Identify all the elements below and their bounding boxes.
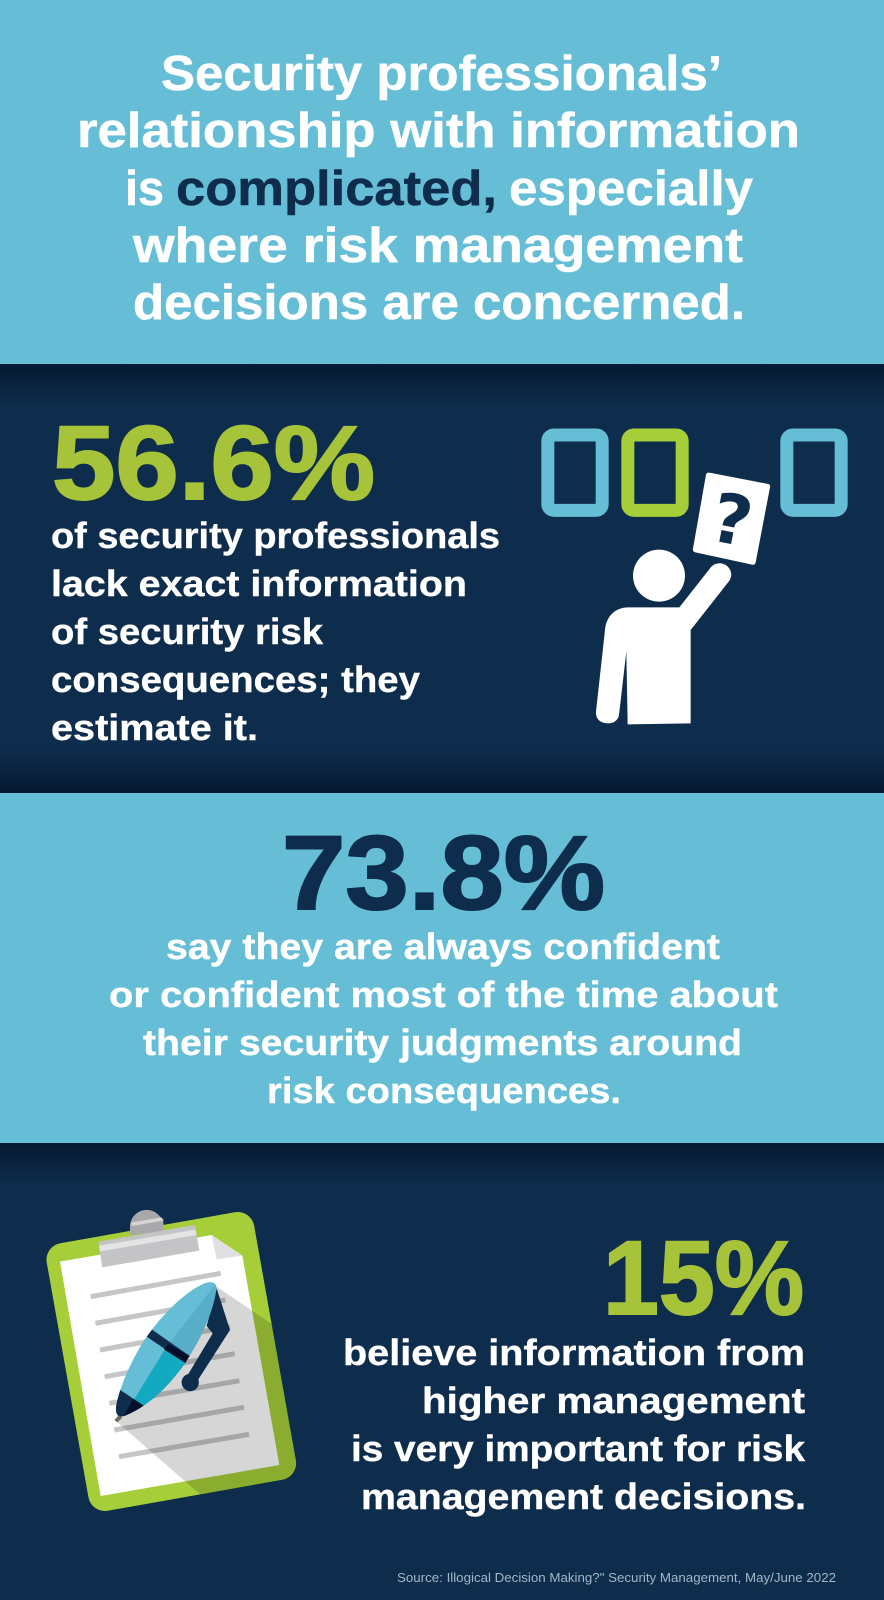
- statistic text: risk consequences.: [267, 1070, 621, 1111]
- statistic text: [343, 1332, 806, 1517]
- clipboard board: [44, 1209, 299, 1514]
- title: is: [125, 162, 164, 216]
- statistic text: estimate it.: [51, 707, 258, 748]
- title: relationship with information: [77, 104, 800, 158]
- statistic number: 56.6%: 56.6%: [52, 405, 375, 522]
- title: complicated,: [176, 162, 497, 216]
- title: especially: [509, 162, 753, 216]
- statistic text: of security risk: [51, 611, 324, 652]
- statistic text: [109, 926, 778, 1111]
- statistic text: of security professionals: [51, 515, 500, 556]
- panel: 73.8% statistic: [0, 793, 884, 1143]
- icon: person holding question card: [548, 435, 841, 724]
- statistic text: higher management: [422, 1380, 805, 1421]
- title: decisions are concerned.: [133, 276, 745, 330]
- pen body: [116, 1282, 216, 1417]
- statistic text: say they are always confident: [166, 926, 720, 967]
- clip: [98, 1217, 199, 1267]
- icon: clipboard with pen: [46, 1210, 296, 1511]
- statistic number: 15%: 15%: [603, 1220, 804, 1337]
- clip tab: [130, 1210, 163, 1235]
- pen clip: [182, 1288, 230, 1391]
- source note: Source: Illogical Decision Making?" Security Management, May/June 2022: [397, 1570, 836, 1585]
- statistic text: management decisions.: [361, 1476, 806, 1517]
- statistic text: consequences; they: [51, 659, 420, 700]
- panel: header: [0, 0, 884, 364]
- title: Security professionals’: [161, 47, 722, 101]
- panel: 56.6% statistic: [0, 364, 884, 793]
- icon: person holding question card: ?: [705, 479, 759, 564]
- clipboard paper: [60, 1235, 279, 1496]
- pen shadow: [118, 1286, 296, 1494]
- statistic text: their security judgments around: [143, 1022, 742, 1063]
- statistic text: believe information from: [343, 1332, 805, 1373]
- panel: 15% statistic: [0, 1143, 884, 1600]
- statistic text: lack exact information: [51, 563, 467, 604]
- statistic text: or confident most of the time about: [109, 974, 778, 1015]
- title: [77, 47, 800, 330]
- statistic text: is very important for risk: [351, 1428, 806, 1469]
- text lines on paper: [91, 1273, 249, 1457]
- statistic number: 73.8%: 73.8%: [282, 815, 605, 932]
- title: where risk management: [132, 219, 743, 273]
- statistic text: [51, 515, 500, 748]
